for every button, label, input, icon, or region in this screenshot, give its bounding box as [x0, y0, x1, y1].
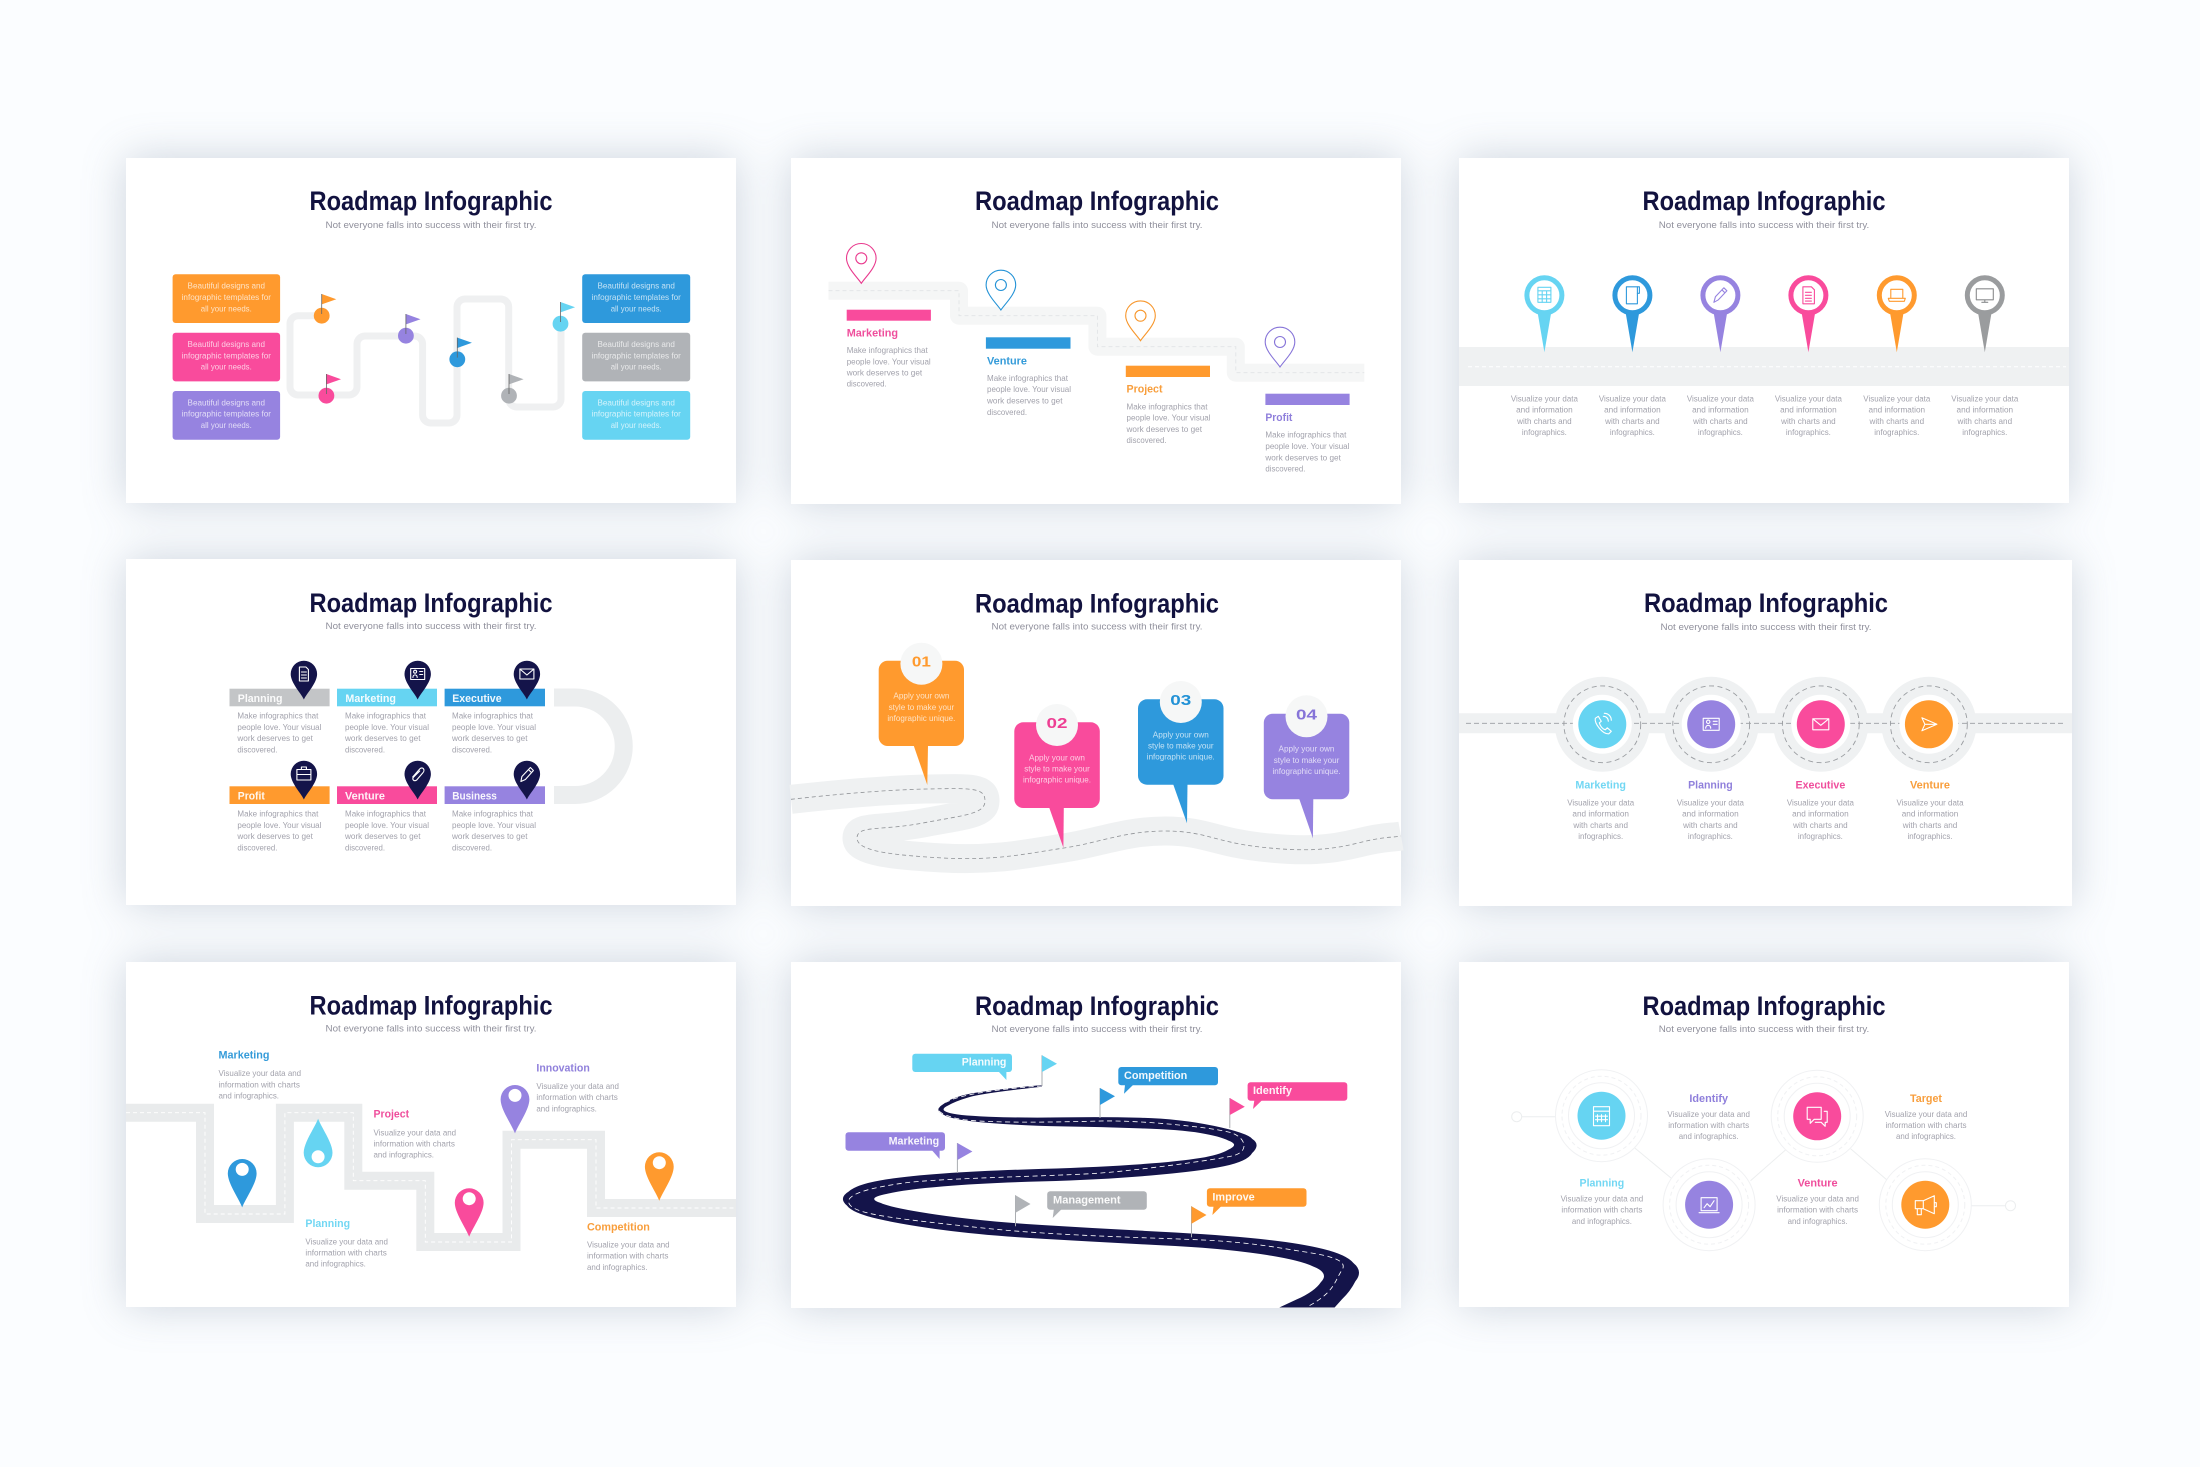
caption: Planning: Visualize your data — [1677, 798, 1744, 808]
caption: Venture: Venture — [1910, 779, 1950, 791]
navy pin: paperclip — [404, 761, 431, 800]
label: Planning — [912, 1054, 1012, 1080]
caption: Venture: infographics. — [1908, 831, 1952, 841]
caption 4: infographics. — [1786, 427, 1831, 437]
caption: Marketing: and information — [1572, 809, 1629, 819]
item: Business: work deserves to get — [451, 831, 528, 841]
pin: pink — [455, 1188, 484, 1237]
caption 5: with charts and — [1869, 416, 1924, 426]
text box: purple: Beautiful designs and — [188, 397, 265, 407]
flag marker: grey — [501, 374, 524, 404]
item: Profit: people love. Your visual — [237, 820, 321, 830]
text: Project: information with charts — [374, 1138, 455, 1148]
navy pin: envelope — [514, 661, 540, 700]
item: Venture: people love. Your visual — [345, 820, 429, 830]
caption 2: with charts and — [1604, 416, 1660, 426]
item: Planning: people love. Your visual — [237, 722, 321, 732]
road: horizontal with ring discs — [1459, 677, 2072, 772]
flag: pink — [1230, 1098, 1245, 1128]
caption 3 — [1687, 394, 1754, 437]
caption 1: and information — [1516, 405, 1573, 415]
step: Venture: Make infographics that — [987, 373, 1069, 383]
road: curvy — [791, 789, 1401, 859]
callout 02: 02 — [1046, 716, 1068, 732]
text box: purple — [173, 391, 280, 440]
text box: cyan: Beautiful designs and — [597, 397, 675, 407]
callout 01: 01 — [912, 654, 931, 670]
text box: cyan: all your needs. — [611, 420, 662, 430]
text: Identify: Visualize your data and — [1667, 1109, 1750, 1119]
pin: purple outline — [1265, 327, 1295, 367]
text: Planning: Visualize your data and — [1561, 1194, 1643, 1204]
step: Venture: discovered. — [987, 407, 1027, 417]
item: Executive — [445, 689, 545, 754]
caption 1: with charts and — [1516, 416, 1572, 426]
pin: orange laptop — [1879, 278, 1914, 352]
step: Project: discovered. — [1126, 435, 1166, 445]
panel: linked ring nodes — [1459, 962, 2069, 1307]
road: stepped — [828, 291, 1364, 373]
caption 4: and information — [1780, 405, 1837, 415]
callout 04: infographic unique. — [1272, 766, 1340, 776]
text: Marketing: information with charts — [218, 1079, 300, 1089]
caption: Marketing: infographics. — [1578, 831, 1623, 841]
text: Project: Visualize your data and — [374, 1127, 456, 1137]
text: Innovation: Visualize your data and — [536, 1081, 619, 1091]
text: Venture: and infographics. — [1788, 1216, 1848, 1226]
label: Competition: Competition — [1124, 1070, 1188, 1082]
title: Roadmap Infographic — [975, 186, 1219, 216]
step: Marketing: work deserves to get — [846, 368, 923, 378]
callout 03 — [1138, 681, 1224, 823]
road: winding path — [290, 299, 561, 423]
item: Profit: discovered. — [237, 842, 277, 852]
text: Venture: Venture — [1798, 1178, 1838, 1190]
step: Profit: Make infographics that — [1265, 430, 1347, 440]
callout 04: 04 — [1296, 707, 1317, 723]
text: Marketing — [218, 1050, 301, 1100]
text box: orange: all your needs. — [201, 303, 252, 313]
caption: Executive: and information — [1792, 809, 1849, 819]
item: Executive: people love. Your visual — [452, 722, 536, 732]
text box: orange: Beautiful designs and — [188, 281, 265, 291]
step: Profit: Profit — [1265, 412, 1293, 424]
text: Venture: Visualize your data and — [1776, 1194, 1859, 1204]
item: Profit — [230, 786, 330, 852]
caption 3: and information — [1692, 405, 1749, 415]
step: Profit — [1264, 394, 1350, 473]
text: Identify — [1667, 1093, 1750, 1141]
node: pink chat — [1771, 1070, 1863, 1162]
text: Innovation — [536, 1063, 619, 1113]
item: Profit: Profit — [238, 790, 265, 802]
text box: orange: infographic templates for — [182, 292, 271, 302]
caption 6: with charts and — [1957, 416, 2012, 426]
connector lines — [1512, 1112, 2016, 1211]
pin: blue — [228, 1159, 257, 1207]
caption 1 — [1511, 394, 1578, 437]
title: Roadmap Infographic — [975, 991, 1219, 1021]
callout 03: infographic unique. — [1147, 752, 1215, 762]
caption 5: and information — [1868, 405, 1925, 415]
label: Marketing: Marketing — [889, 1135, 939, 1147]
text box: blue: infographic templates for — [592, 292, 681, 302]
panel: six map pins over straight road — [1459, 158, 2069, 503]
item: Marketing: work deserves to get — [344, 733, 421, 743]
step: Project: Project — [1126, 384, 1163, 396]
step: Profit: discovered. — [1265, 463, 1305, 473]
pin: pink document — [1791, 278, 1826, 352]
text: Identify: information with charts — [1668, 1120, 1749, 1130]
stop icon: envelope — [1791, 695, 1850, 754]
text: Competition — [587, 1221, 670, 1272]
caption: Executive: Executive — [1796, 779, 1845, 791]
callout 01: Apply your own — [893, 691, 950, 701]
title: Roadmap Infographic — [1642, 186, 1886, 216]
caption: Executive: infographics. — [1798, 831, 1843, 841]
panel: dark winding highway with flags — [791, 962, 1401, 1308]
item: Planning: discovered. — [237, 744, 277, 754]
item: Marketing — [337, 689, 437, 754]
label: Improve — [1207, 1188, 1306, 1215]
caption: Executive — [1787, 779, 1854, 841]
text: Identify: Identify — [1689, 1093, 1729, 1105]
text: Planning: and infographics. — [1572, 1216, 1632, 1226]
flag marker: orange — [314, 294, 336, 324]
stop icon: id card — [1682, 695, 1741, 754]
caption 4: Visualize your data — [1775, 394, 1842, 404]
flag: grey — [1016, 1195, 1030, 1226]
text: Competition: information with charts — [587, 1251, 668, 1261]
pin: purple pencil — [1703, 278, 1738, 352]
callout 04: style to make your — [1274, 755, 1339, 765]
caption: Executive: with charts and — [1792, 820, 1848, 830]
step: Marketing: discovered. — [847, 379, 887, 389]
item: Executive: work deserves to get — [451, 733, 528, 743]
text: Planning: Visualize your data and — [305, 1236, 388, 1246]
label: Planning: Planning — [962, 1057, 1006, 1069]
item: Planning — [230, 689, 330, 754]
label: Improve: Improve — [1212, 1192, 1255, 1204]
step: Marketing: Make infographics that — [847, 345, 928, 355]
text: Innovation: Innovation — [536, 1063, 590, 1075]
node: purple chart — [1663, 1159, 1755, 1251]
label: Competition — [1118, 1067, 1218, 1094]
text: Planning: information with charts — [1561, 1205, 1642, 1215]
text: Planning: Planning — [305, 1218, 350, 1230]
text: Innovation: and infographics. — [536, 1103, 597, 1113]
item: Planning: Make infographics that — [237, 711, 319, 721]
flag: cyan — [1042, 1055, 1057, 1086]
flag: purple — [957, 1143, 972, 1173]
caption: Venture: with charts and — [1902, 820, 1957, 830]
text box: grey: infographic templates for — [592, 350, 681, 360]
navy pin: briefcase — [291, 761, 317, 800]
step: Marketing: Marketing — [847, 328, 898, 340]
text: Project: Project — [374, 1109, 409, 1121]
item: Business: Business — [452, 790, 497, 802]
pin: orange — [645, 1152, 674, 1201]
text: Target: and infographics. — [1896, 1131, 1956, 1141]
caption 1: infographics. — [1522, 427, 1567, 437]
item: Profit: Make infographics that — [237, 809, 319, 819]
item: Planning: Planning — [238, 693, 282, 705]
flag: orange — [1192, 1206, 1206, 1237]
subtitle: Not everyone falls into success with their first try. — [1659, 1024, 1869, 1035]
caption 3: Visualize your data — [1687, 394, 1754, 404]
item: Venture: discovered. — [345, 842, 385, 852]
caption: Planning: Planning — [1688, 779, 1733, 791]
callout 01: style to make your — [889, 702, 954, 712]
item: Venture — [337, 786, 437, 852]
step: Venture: people love. Your visual — [987, 384, 1071, 394]
subtitle: Not everyone falls into success with their first try. — [992, 220, 1202, 231]
caption: Venture: and information — [1902, 809, 1958, 819]
step: Venture: Venture — [987, 355, 1027, 367]
text: Target: Visualize your data and — [1885, 1109, 1967, 1119]
text box: cyan — [582, 391, 690, 440]
flag: blue — [1100, 1088, 1115, 1118]
caption 2: and information — [1604, 405, 1661, 415]
pin: pink outline — [846, 243, 876, 283]
node: cyan calendar — [1556, 1070, 1648, 1162]
caption: Venture: Visualize your data — [1896, 798, 1964, 808]
caption 5 — [1863, 394, 1930, 437]
text: Project: and infographics. — [374, 1150, 434, 1160]
callout 01: infographic unique. — [887, 713, 955, 723]
road: zigzag — [126, 1113, 736, 1242]
caption 4: with charts and — [1780, 416, 1836, 426]
text box: grey: Beautiful designs and — [597, 339, 675, 349]
road: navy highway — [843, 1085, 1359, 1308]
text: Project — [374, 1109, 456, 1160]
step: Venture — [986, 337, 1071, 417]
flag marker: pink — [318, 374, 341, 404]
caption 2: infographics. — [1610, 427, 1655, 437]
subtitle: Not everyone falls into success with their first try. — [326, 621, 536, 632]
text: Venture — [1776, 1178, 1859, 1226]
step: Project — [1126, 366, 1211, 445]
subtitle: Not everyone falls into success with their first try. — [992, 1024, 1202, 1035]
item: Venture: Venture — [345, 790, 385, 802]
text box: orange — [173, 274, 280, 323]
step: Venture: work deserves to get — [986, 396, 1063, 406]
caption 6 — [1951, 394, 2018, 437]
callout 03: 03 — [1170, 693, 1191, 709]
text: Target: information with charts — [1886, 1120, 1966, 1130]
subtitle: Not everyone falls into success with their first try. — [992, 622, 1202, 633]
caption: Marketing — [1567, 779, 1634, 841]
item: Marketing: Marketing — [345, 693, 396, 705]
text: Venture: information with charts — [1777, 1205, 1858, 1215]
navy pin: document — [291, 661, 317, 700]
item: Venture: work deserves to get — [344, 831, 421, 841]
text: Planning — [1561, 1178, 1643, 1226]
item: Executive: Make infographics that — [452, 711, 534, 721]
label: Identify — [1248, 1082, 1347, 1109]
road: horizontal band — [1459, 347, 2069, 386]
caption 1: Visualize your data — [1511, 394, 1578, 404]
text: Planning: Planning — [1580, 1178, 1624, 1190]
caption 5: infographics. — [1874, 427, 1919, 437]
text box: grey: all your needs. — [611, 362, 662, 372]
label: Identify: Identify — [1253, 1085, 1293, 1097]
navy pin: id card — [404, 661, 431, 700]
panel: square zigzag road with solid pins — [126, 962, 736, 1307]
pin: orange outline — [1126, 301, 1155, 341]
navy pin: pencil — [514, 761, 540, 800]
step: Project: people love. Your visual — [1126, 413, 1211, 423]
panel: flag roadmap with side boxes — [126, 158, 736, 503]
title: Roadmap Infographic — [310, 588, 552, 618]
caption 3: with charts and — [1692, 416, 1748, 426]
text: Marketing: Visualize your data and — [218, 1068, 301, 1078]
label: Marketing — [846, 1132, 945, 1159]
pin: purple — [501, 1085, 529, 1133]
caption 5: Visualize your data — [1863, 394, 1930, 404]
callout 03: style to make your — [1148, 741, 1214, 751]
item: Marketing: people love. Your visual — [345, 722, 429, 732]
text box: blue: all your needs. — [611, 303, 662, 313]
text: Marketing: and infographics. — [218, 1090, 279, 1100]
item: Business — [445, 786, 545, 852]
caption 2: Visualize your data — [1599, 394, 1666, 404]
subtitle: Not everyone falls into success with their first try. — [326, 220, 536, 231]
step: Project: Make infographics that — [1126, 401, 1208, 411]
stop icon: phone — [1573, 695, 1632, 754]
caption 3: infographics. — [1698, 427, 1743, 437]
text: Planning: information with charts — [305, 1247, 387, 1257]
text box: purple: all your needs. — [201, 420, 252, 430]
item: Executive: discovered. — [452, 744, 492, 754]
text: Competition: and infographics. — [587, 1262, 648, 1272]
panel: curvy road with numbered callouts — [791, 560, 1401, 906]
text: Identify: and infographics. — [1679, 1131, 1739, 1141]
subtitle: Not everyone falls into success with their first try. — [326, 1024, 536, 1035]
text: Competition: Visualize your data and — [587, 1240, 670, 1250]
item: Venture: Make infographics that — [345, 809, 427, 819]
pin: cyan calendar — [1527, 278, 1562, 352]
caption 6: Visualize your data — [1951, 394, 2018, 404]
text box: grey — [582, 333, 690, 381]
text: Innovation: information with charts — [536, 1092, 618, 1102]
item: Business: Make infographics that — [452, 809, 534, 819]
caption: Venture — [1896, 779, 1964, 841]
stop icon: paper plane — [1899, 695, 1958, 754]
caption: Executive: Visualize your data — [1787, 798, 1854, 808]
caption: Marketing: Visualize your data — [1567, 798, 1634, 808]
flag marker: purple — [398, 314, 420, 344]
pin: cyan inverted — [304, 1119, 332, 1167]
step: Marketing: people love. Your visual — [847, 356, 931, 366]
text: Target: Target — [1910, 1093, 1942, 1105]
text box: pink: infographic templates for — [182, 350, 271, 360]
title: Roadmap Infographic — [310, 991, 552, 1021]
panel: two-row bars with navy pins — [126, 559, 736, 905]
node: orange megaphone — [1879, 1159, 1971, 1251]
subtitle: Not everyone falls into success with their first try. — [1660, 622, 1872, 633]
caption: Planning: infographics. — [1688, 831, 1733, 841]
callout 02: style to make your — [1024, 764, 1090, 774]
caption 4 — [1775, 394, 1842, 437]
callout 02: infographic unique. — [1023, 775, 1091, 785]
title: Roadmap Infographic — [1642, 991, 1886, 1021]
step: Profit: work deserves to get — [1264, 452, 1341, 462]
step: Project: work deserves to get — [1126, 424, 1203, 434]
caption: Marketing: Marketing — [1575, 779, 1626, 791]
text box: pink: Beautiful designs and — [188, 339, 265, 349]
caption 2 — [1599, 394, 1666, 437]
caption: Planning — [1677, 779, 1744, 841]
label: Management — [1047, 1191, 1147, 1218]
caption: Marketing: with charts and — [1572, 820, 1628, 830]
step: Marketing — [846, 310, 931, 389]
text box: purple: infographic templates for — [182, 409, 271, 419]
flag marker: blue — [449, 338, 472, 367]
panel: descending stair road with outline pins — [791, 158, 1401, 504]
text box: cyan: infographic templates for — [592, 409, 681, 419]
title: Roadmap Infographic — [1644, 588, 1888, 618]
label: Management: Management — [1053, 1194, 1121, 1206]
item: Executive: Executive — [452, 693, 502, 705]
caption 6: and information — [1956, 405, 2013, 415]
caption 6: infographics. — [1962, 427, 2007, 437]
caption: Planning: and information — [1682, 809, 1739, 819]
text box: blue — [582, 274, 690, 323]
caption: Planning: with charts and — [1682, 820, 1738, 830]
flag marker: cyan — [553, 302, 575, 332]
text box: pink — [173, 333, 280, 381]
text box: pink: all your needs. — [201, 362, 252, 372]
pin: grey monitor — [1967, 278, 2002, 352]
callout 02: Apply your own — [1029, 752, 1085, 762]
text: Planning: and infographics. — [305, 1259, 366, 1269]
text box: blue: Beautiful designs and — [597, 281, 675, 291]
subtitle: Not everyone falls into success with their first try. — [1659, 220, 1869, 231]
callout 04: Apply your own — [1278, 744, 1335, 754]
text: Competition: Competition — [587, 1221, 650, 1233]
panel: four circular stops on a road — [1459, 560, 2072, 906]
item: Profit: work deserves to get — [236, 831, 313, 841]
callout 01 — [879, 643, 964, 785]
callout 03: Apply your own — [1153, 729, 1209, 739]
item: Marketing: discovered. — [345, 744, 385, 754]
item: Marketing: Make infographics that — [345, 711, 427, 721]
item: Business: discovered. — [452, 842, 492, 852]
pin: blue notebook — [1615, 278, 1650, 352]
item: Business: people love. Your visual — [452, 820, 536, 830]
step: Profit: people love. Your visual — [1265, 441, 1349, 451]
text: Marketing: Marketing — [218, 1050, 270, 1062]
text: Target — [1885, 1093, 1967, 1141]
callout 02 — [1014, 704, 1100, 848]
title: Roadmap Infographic — [975, 588, 1219, 618]
road: U-turn arc — [554, 698, 624, 795]
text: Planning — [305, 1218, 388, 1269]
callout 04 — [1264, 695, 1349, 838]
title: Roadmap Infographic — [310, 186, 552, 216]
pin: blue outline — [986, 270, 1016, 310]
item: Planning: work deserves to get — [236, 733, 313, 743]
